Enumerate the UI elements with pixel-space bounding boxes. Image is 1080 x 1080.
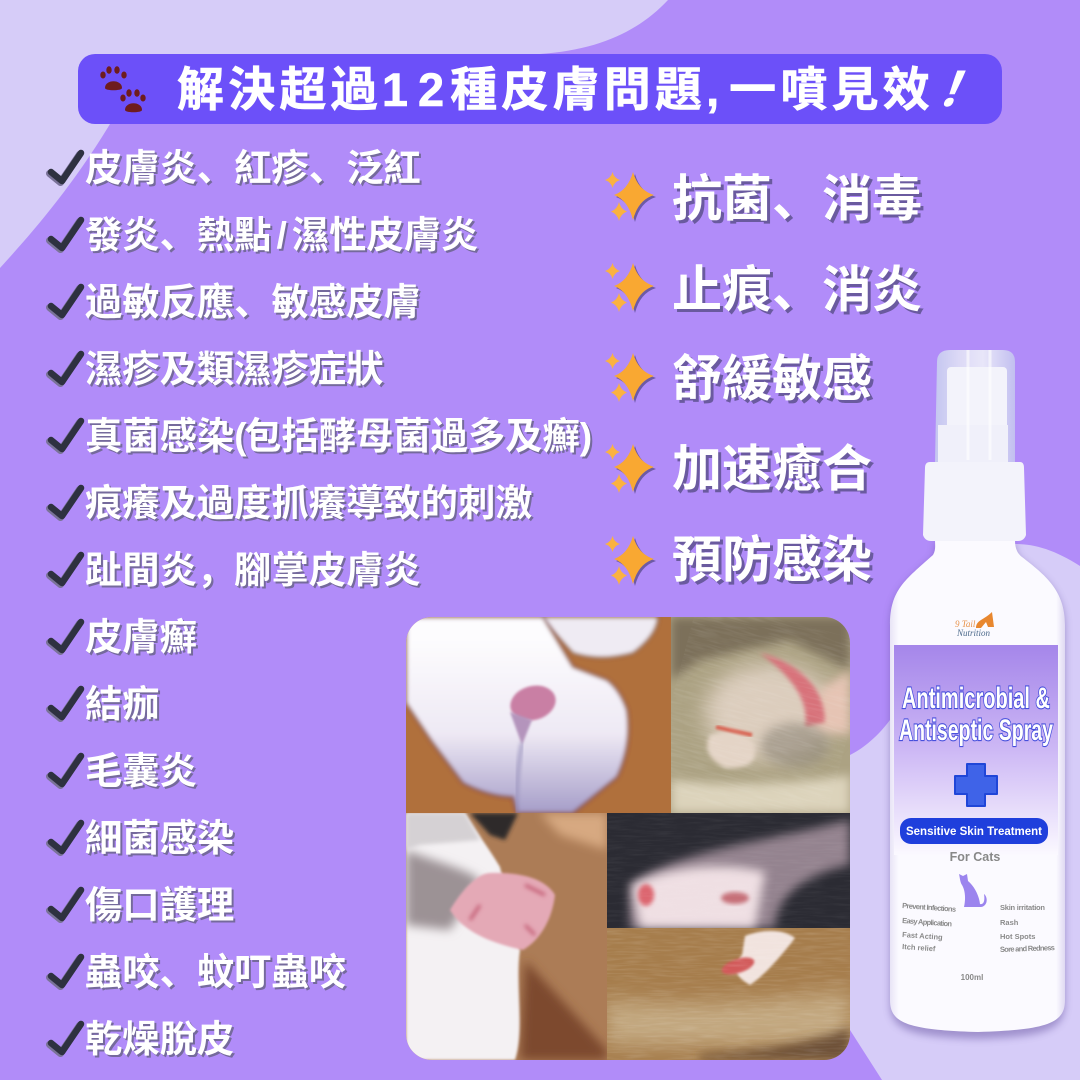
skin problems list: 乾燥脫皮 [85,1018,234,1060]
ribbed collar [923,462,1026,541]
skin problems list: 皮膚炎、紅疹、泛紅 [85,147,421,189]
photo: cat ear with redness [406,813,607,1060]
skin problems list: 趾間炎，腳掌皮膚炎 [85,549,421,591]
product name [899,682,1053,747]
icon: paw prints [100,66,146,112]
photo: tan fur with pale lesion [607,928,850,1060]
brand logo [955,612,994,638]
product label [894,612,1058,982]
icon: medical cross [955,764,997,806]
photo: scabbed fur patch [671,617,850,813]
skin problems list [85,147,592,1060]
benefits list: 抗菌、消毒 [672,171,922,227]
icon: cat [959,874,987,907]
treatment pill: Sensitive Skin Treatment [906,826,1042,838]
benefits list [672,171,924,588]
photo: cat paw with lesion [406,617,671,813]
skin problems list: 真菌感染(包括酵母菌過多及癬) [85,415,590,457]
skin problems list: 發炎、熱點/濕性皮膚炎 [85,214,478,256]
bullet features right: Rash [1000,918,1019,927]
bullet features left [902,901,956,953]
for cats text: For Cats [950,850,1000,864]
bullet features right: Skin irritation [1000,903,1045,912]
photo collage [406,617,850,1060]
benefits list: 止痕、消炎 [672,262,922,318]
benefits list: 舒緩敏感 [672,351,872,407]
bottle body [890,540,1065,1032]
skin problems list: 結痂 [85,683,160,725]
treatment pill [900,818,1048,844]
transparent cap [935,350,1015,462]
bullet features left: Prevent Infections [902,901,956,914]
benefits list: 加速癒合 [672,441,872,497]
bullet features left: Fast Acting [902,930,943,942]
skin problems list: 毛囊炎 [85,750,197,792]
heading: 解決超過12種皮膚問題,一噴見效 [177,63,934,116]
photo: dark fur with bald patch [607,813,850,928]
bullet features left: Easy Application [902,916,953,929]
brand logo: Nutrition [956,628,991,638]
skin problems list: 傷口護理 [85,884,234,926]
bullet features right [1000,903,1055,954]
skin problems list: 細菌感染 [85,817,234,859]
title banner [78,54,1002,124]
brand logo: 9 Tail [955,619,976,629]
skin problems list: 皮膚癬 [85,616,197,658]
bullet features right: Hot Spots [1000,932,1035,941]
bullet features left: Itch relief [902,942,936,953]
skin problems list: 痕癢及過度抓癢導致的刺激 [85,482,533,524]
skin problems list: 濕疹及類濕疹症狀 [85,348,383,390]
checkmarks column [46,150,84,1057]
heading: ！ [931,63,1004,116]
sparkle icons [605,172,656,586]
bullet features right: Sore and Redness [1000,943,1055,954]
skin problems list: 過敏反應、敏感皮膚 [85,281,421,323]
benefits list: 預防感染 [672,532,872,588]
skin problems list: 蟲咬、蚊叮蟲咬 [85,951,346,993]
bottle shadow [890,543,1065,1039]
volume text: 100ml [961,973,983,982]
